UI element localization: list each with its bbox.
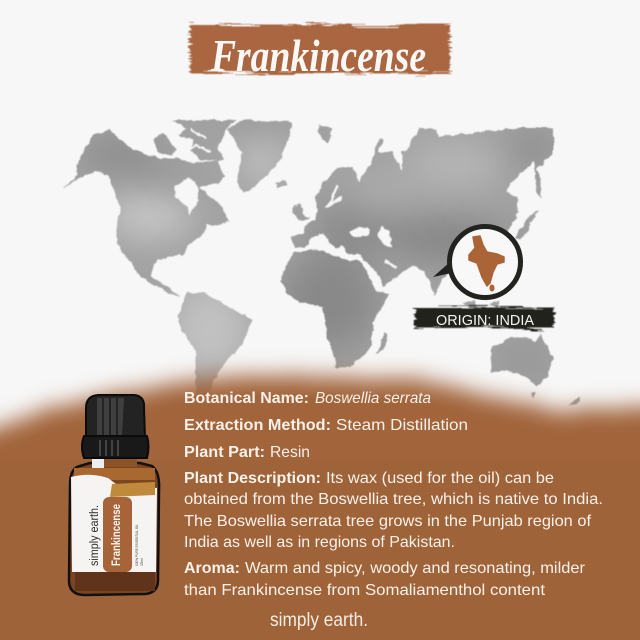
extraction method (184, 417, 468, 434)
bottle text: simply earth. (89, 505, 101, 566)
magnifier circle (433, 226, 520, 298)
botanical name: Botanical Name: (184, 390, 309, 407)
origin callout (415, 226, 554, 329)
brown ground fade (0, 340, 640, 640)
bottle text: 100% PURE ESSENTIAL OIL (135, 524, 139, 566)
title banner (190, 25, 450, 81)
botanical name: Boswellia serrata (315, 390, 431, 407)
aroma: Warm and spicy, woody and resonating, milder (245, 560, 586, 577)
extraction method: Steam Distillation (336, 417, 468, 434)
plant description: The Boswellia serrata tree grows in the Punjab region of (184, 513, 592, 530)
brush stroke (190, 25, 450, 73)
plant part: Resin (270, 444, 310, 461)
plant part (184, 444, 310, 461)
plant description: Its wax (used for the oil) can be (326, 470, 554, 487)
bottle text: Frankincense (109, 504, 123, 566)
plant description: Plant Description: (184, 470, 321, 487)
bottle label (71, 475, 157, 572)
footer logo: simply earth. (270, 610, 368, 631)
product bottle (69, 395, 159, 595)
aroma: Aroma: (184, 560, 240, 577)
icon: india map (469, 236, 504, 291)
bottle neck (93, 458, 137, 467)
bottle text (89, 504, 144, 566)
botanical name (184, 390, 431, 407)
bottle cap (82, 395, 148, 458)
plant description: obtained from the Boswellia tree, which is native to India. (184, 491, 603, 508)
world map (50, 115, 580, 405)
inland seas (172, 128, 397, 291)
extraction method: Extraction Method: (184, 417, 331, 434)
plant description (184, 470, 603, 551)
title text: Frankincense (210, 31, 426, 81)
origin label: ORIGIN: INDIA (436, 313, 534, 329)
plant part: Plant Part: (184, 444, 265, 461)
bottle name pill (103, 497, 132, 572)
bottle text: 15ml (140, 558, 144, 566)
aroma: than Frankincense from Somaliamenthol content (184, 582, 546, 599)
facts text block (184, 390, 603, 599)
plant description: India as well as in regions of Pakistan. (184, 534, 455, 551)
aroma (184, 560, 586, 599)
bottle body (69, 463, 159, 595)
